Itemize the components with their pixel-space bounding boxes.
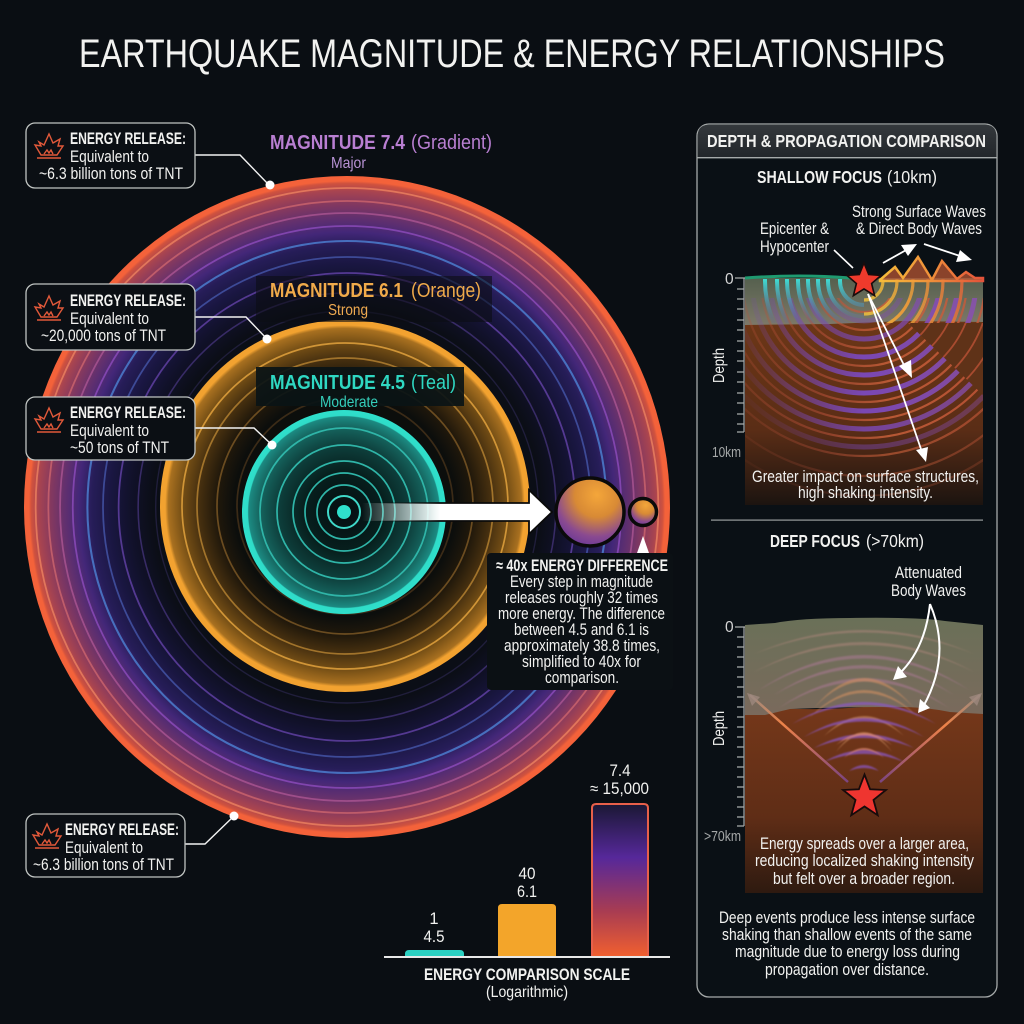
text: shallow impact: high shaking intensity. bbox=[798, 484, 933, 502]
callout: 40x energy difference: simplified to 40x for bbox=[522, 653, 641, 671]
callout: energy release 6.1: ENERGY RELEASE: bbox=[70, 291, 186, 310]
label: magnitude 6.1: Strong bbox=[328, 302, 368, 319]
leader line bbox=[195, 317, 272, 344]
callout: energy release 7.4: Equivalent to bbox=[70, 148, 149, 166]
callout: energy release 4.5 bbox=[26, 397, 276, 460]
callout: 40x energy difference: comparison. bbox=[545, 669, 619, 687]
icon: explosion bbox=[35, 408, 63, 432]
text: depth summary: Deep events produce less intense surface bbox=[719, 909, 975, 927]
callout: energy release 6.1: ~20,000 tons of TNT bbox=[41, 327, 166, 345]
arrows: attenuated waves bbox=[893, 604, 939, 713]
callout: 40x energy difference bbox=[487, 553, 673, 690]
energy ray left bbox=[747, 693, 848, 782]
heading: shallow focus: (10km) bbox=[887, 167, 937, 187]
axis: deep depth: >70km bbox=[704, 829, 741, 845]
magnitude 7.4 ring bbox=[24, 176, 670, 838]
panel header bbox=[697, 125, 997, 158]
label: attenuated body waves bbox=[891, 564, 966, 600]
near-surface teal waves bbox=[763, 279, 864, 323]
axis: deep depth: Depth bbox=[711, 711, 728, 746]
callout: energy release lower: Equivalent to bbox=[65, 839, 143, 857]
callout: energy release 4.5: ~50 tons of TNT bbox=[70, 439, 169, 457]
axis: shallow depth: Depth bbox=[711, 348, 728, 383]
text: deep energy spread: but felt over a broader region. bbox=[773, 870, 955, 888]
label: magnitude 7.4: (Gradient) bbox=[411, 131, 492, 154]
chart caption: (Logarithmic) bbox=[486, 984, 568, 1001]
magnitude 6.1 ring bbox=[160, 320, 530, 692]
heading: shallow focus: SHALLOW FOCUS bbox=[757, 167, 882, 187]
label: magnitude 4.5: Moderate bbox=[320, 394, 378, 411]
text: depth summary bbox=[719, 909, 975, 979]
label: strong surface waves: Strong Surface Waves bbox=[852, 203, 986, 221]
callout: 40x energy difference: ≈ 40x ENERGY DIFFERENCE bbox=[496, 557, 668, 575]
bar: 7.4: ≈ 15,000 bbox=[590, 780, 649, 798]
text: depth summary: shaking than shallow events of the same bbox=[722, 926, 972, 944]
icon: explosion bbox=[33, 824, 61, 848]
callout: 40x energy difference: between 4.5 and 6.1 is bbox=[514, 621, 649, 639]
icon: explosion bbox=[35, 296, 63, 320]
sphere: small energy bbox=[630, 498, 656, 526]
callout: energy release lower bbox=[26, 812, 238, 877]
label: epicenter and hypocenter: Epicenter & bbox=[760, 220, 829, 238]
label: magnitude 6.1: MAGNITUDE 6.1 bbox=[270, 279, 403, 302]
bar: 6.1: 6.1 bbox=[517, 883, 537, 901]
arrow: magnitude comparison bbox=[362, 490, 552, 534]
label: attenuated body waves: Attenuated bbox=[895, 564, 962, 582]
text: deep energy spread: Energy spreads over a larger area, bbox=[760, 835, 969, 853]
energy ray right bbox=[880, 693, 982, 782]
callout: energy release 7.4: ~6.3 billion tons of TNT bbox=[39, 165, 183, 183]
axis: shallow depth bbox=[711, 271, 745, 461]
label: strong surface waves bbox=[852, 203, 986, 238]
label: attenuated body waves: Body Waves bbox=[891, 582, 966, 600]
label: magnitude 7.4: Major bbox=[331, 155, 367, 172]
arrow: surface wave left bbox=[883, 244, 917, 263]
axis: deep depth bbox=[704, 619, 745, 845]
callout: energy release lower: ~6.3 billion tons of TNT bbox=[33, 856, 174, 874]
sphere: large energy bbox=[556, 478, 624, 546]
axis: deep depth: 0 bbox=[725, 619, 734, 636]
bar: 7.4: 7.4 bbox=[610, 762, 630, 780]
label: magnitude 4.5: (Teal) bbox=[411, 371, 456, 394]
callout: energy release 4.5: Equivalent to bbox=[70, 422, 149, 440]
text: deep energy spread: reducing localized shaking intensity bbox=[755, 852, 975, 870]
leader line bbox=[195, 428, 276, 450]
leader line bbox=[195, 155, 274, 190]
bar: 4.5 bbox=[405, 910, 464, 957]
callout: energy release 7.4 bbox=[26, 123, 274, 190]
concentric magnitude circles bbox=[24, 176, 670, 838]
deflected wedge bbox=[908, 323, 983, 395]
text: shallow impact: Greater impact on surface structures, bbox=[752, 468, 979, 486]
label: strong surface waves: & Direct Body Waves bbox=[856, 220, 982, 238]
bar: 4.5: 4.5 bbox=[424, 928, 444, 946]
callout: 40x energy difference: releases roughly 32 times bbox=[505, 589, 658, 607]
bar: 7.4 bbox=[590, 762, 649, 957]
wave arcs bbox=[745, 298, 983, 496]
callout: 40x energy difference: more energy. The difference bbox=[498, 605, 665, 623]
bar: 4.5: 1 bbox=[429, 910, 439, 928]
text: deep energy spread bbox=[755, 835, 975, 888]
label: magnitude 6.1: (Orange) bbox=[411, 279, 481, 302]
pointer triangle bbox=[637, 536, 649, 553]
callout: 40x energy difference: Every step in magnitude bbox=[510, 573, 653, 591]
chart caption bbox=[424, 965, 630, 1001]
text: depth summary: propagation over distance. bbox=[765, 961, 929, 979]
icon: epicenter star bbox=[847, 263, 881, 296]
bar: 6.1: 40 bbox=[518, 865, 536, 883]
callout: energy release lower: ENERGY RELEASE: bbox=[65, 820, 179, 839]
icon: hypocenter star bbox=[843, 774, 886, 815]
label: magnitude 4.5: MAGNITUDE 4.5 bbox=[270, 371, 405, 394]
heading: deep focus: DEEP FOCUS bbox=[770, 531, 860, 551]
axis: shallow depth: 0 bbox=[725, 271, 734, 288]
callout: energy release 7.4: ENERGY RELEASE: bbox=[70, 129, 186, 148]
arrow: surface wave right bbox=[924, 244, 972, 262]
panel: depth and propagation comparison bbox=[696, 123, 998, 998]
callout: 40x energy difference: approximately 38.8 times, bbox=[504, 637, 660, 655]
leader line bbox=[185, 812, 238, 844]
callout: energy release 4.5: ENERGY RELEASE: bbox=[70, 403, 186, 422]
arrow: body wave long bbox=[868, 294, 928, 462]
callout: energy release 6.1 bbox=[26, 284, 272, 350]
attenuated wave arcs bbox=[754, 630, 974, 771]
text: depth summary: magnitude due to energy loss during bbox=[735, 943, 960, 961]
label: magnitude 6.1 bbox=[256, 276, 492, 322]
arrow: epicenter pointer bbox=[834, 250, 853, 268]
diagram: deep focus bbox=[745, 618, 983, 893]
near-surface hot waves bbox=[864, 279, 964, 323]
callout: energy release 6.1: Equivalent to bbox=[70, 310, 149, 328]
axis: shallow depth: 10km bbox=[712, 445, 741, 461]
label: magnitude 7.4 bbox=[270, 131, 492, 172]
arrow: body wave short bbox=[868, 294, 912, 378]
label: magnitude 7.4: MAGNITUDE 7.4 bbox=[270, 131, 406, 154]
label: magnitude 4.5 bbox=[256, 367, 464, 411]
chart caption: ENERGY COMPARISON SCALE bbox=[424, 965, 630, 984]
label: epicenter and hypocenter: Hypocenter bbox=[760, 238, 829, 256]
heading: deep focus: (>70km) bbox=[866, 531, 924, 551]
diagram: shallow focus bbox=[744, 254, 984, 505]
text: shallow impact bbox=[752, 468, 979, 502]
surface wave peaks bbox=[880, 257, 983, 281]
bar: 6.1 bbox=[498, 865, 556, 957]
label: epicenter and hypocenter bbox=[760, 220, 829, 256]
icon: explosion bbox=[35, 134, 63, 158]
bar chart: energy comparison scale bbox=[384, 762, 670, 1001]
magnitude 4.5 ring bbox=[242, 410, 446, 614]
